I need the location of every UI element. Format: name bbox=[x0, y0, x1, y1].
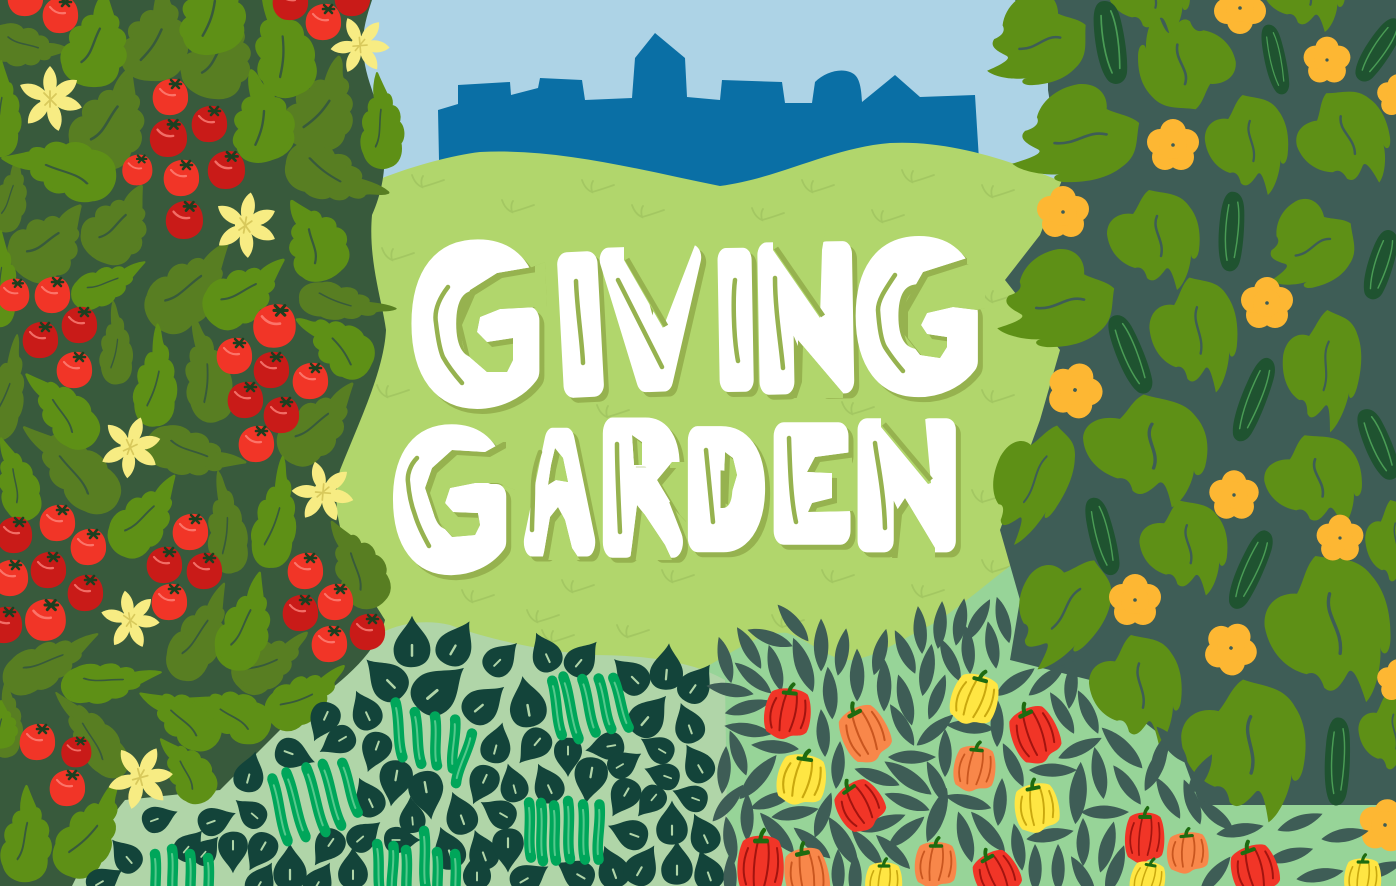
hand-drawn inner letter lines bbox=[408, 275, 903, 546]
title lettering: G bbox=[397, 399, 505, 599]
panel: right cucumber vine backdrop bbox=[1000, 0, 1396, 805]
grassy hill bbox=[300, 143, 1070, 700]
title lettering: R bbox=[606, 399, 675, 576]
letter openings and shadows bbox=[425, 252, 990, 565]
title lettering: I bbox=[717, 222, 754, 417]
left vine leaves bbox=[0, 0, 406, 885]
bean patch foliage bbox=[81, 613, 728, 886]
cucumbers bbox=[1082, 0, 1396, 807]
wedge shadows bbox=[627, 248, 931, 480]
right vine leaves bbox=[965, 0, 1396, 825]
panel: left tomato vine backdrop bbox=[0, 0, 386, 886]
title lettering: N bbox=[858, 394, 955, 576]
title lettering: D bbox=[691, 410, 760, 569]
title lettering: G bbox=[860, 211, 977, 423]
city skyline silhouette bbox=[438, 33, 979, 210]
title lettering: N bbox=[757, 214, 855, 421]
title lettering bbox=[397, 211, 977, 599]
title: GIVING GARDEN bbox=[393, 236, 985, 580]
open wedges in V and N bbox=[624, 226, 931, 484]
title lettering: A bbox=[530, 410, 589, 573]
bean clusters bbox=[155, 677, 629, 886]
title lettering: V bbox=[606, 219, 699, 419]
pepper patch foliage bbox=[705, 595, 1396, 886]
orange squash flowers bbox=[1037, 0, 1396, 854]
pale squash blossoms bbox=[17, 3, 402, 823]
grass tufts bbox=[377, 170, 1014, 642]
title lettering: I bbox=[556, 225, 605, 423]
title lettering: E bbox=[777, 407, 844, 561]
panel: bottom-left bean bed bbox=[60, 622, 728, 886]
tomato clusters bbox=[0, 0, 385, 806]
panel: bottom-right pepper bed bbox=[700, 545, 1396, 886]
title lettering: G bbox=[416, 213, 538, 436]
bell peppers bbox=[737, 665, 1381, 886]
